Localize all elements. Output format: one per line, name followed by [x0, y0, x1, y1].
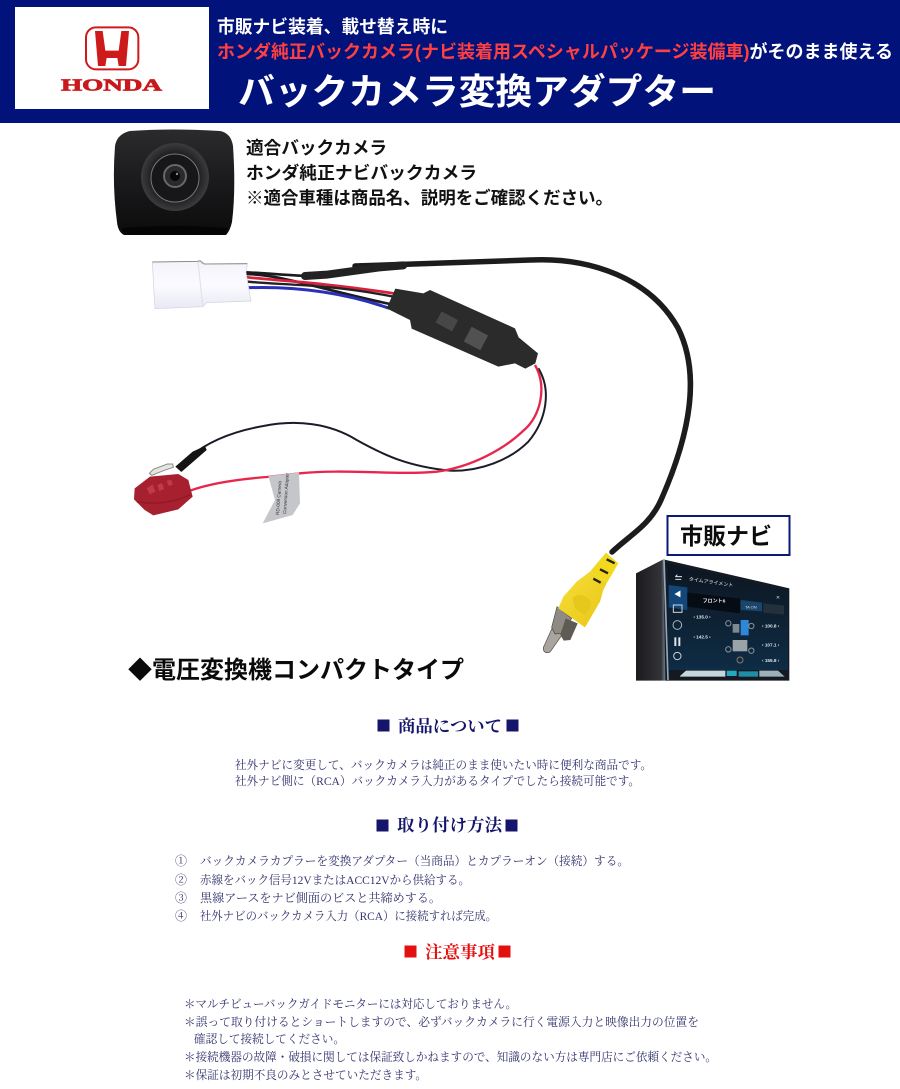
navi values: ‹ 100.8 › [762, 623, 780, 628]
caution notes: ＊誤って取り付けるとショートしますので、必ずバックカメラに行く電源入力と映像出力の位置を [184, 1014, 699, 1029]
navi menu column: ◀ [674, 590, 681, 599]
section: about the product [235, 715, 652, 788]
label tag: Conversion Adapter [282, 472, 290, 514]
navi values: ‹ 135.0 › [693, 615, 711, 620]
navi label: 市販ナビ [680, 523, 772, 549]
red fuse tap [134, 474, 193, 515]
caution notes: ＊接続機器の故障・破損に関しては保証致しかねますので、知識のない方は専門店にご依頼ください。 [184, 1049, 717, 1064]
heading: cautions: 注意事項 [425, 942, 496, 962]
installation steps: ③ [175, 891, 187, 905]
section: installation [175, 815, 629, 923]
navi values: ‹ 155.8 › [762, 658, 780, 663]
navi screen title: タイムアライメント [688, 576, 734, 589]
caution notes: ＊マルチビューバックガイドモニターには対応しておりません。 [184, 996, 517, 1011]
white coupler [152, 261, 251, 309]
heading: cautions: ■ [403, 941, 418, 962]
heading: about product: ■ [376, 715, 391, 736]
navi label [668, 516, 790, 555]
heading: about product: 商品について [398, 717, 502, 736]
heading: about product [376, 715, 520, 736]
label tag [263, 472, 300, 523]
compatible camera text: ※適合車種は商品名、説明をご確認ください。 [246, 188, 613, 208]
aftermarket navi unit: × [776, 594, 780, 601]
compatible camera text: 適合バックカメラ [246, 138, 387, 158]
installation steps: 黒線アースをナビ側面のビスと共締めする。 [200, 890, 441, 905]
aftermarket navi unit [636, 559, 789, 681]
caution notes: ＊保証は初期不良のみとさせていただきます。 [184, 1067, 427, 1082]
caution notes [184, 996, 717, 1082]
installation steps [175, 853, 629, 923]
Honda logo panel [15, 7, 209, 109]
wires to connector [247, 265, 403, 308]
heading: cautions: ■ [497, 941, 512, 962]
aftermarket navi unit: フロント6 [703, 599, 726, 605]
banner title: バックカメラ変換アダプター [238, 71, 716, 112]
installation steps: 赤線をバック信号12VまたはACC12Vから供給する。 [200, 872, 470, 887]
installation steps: バックカメラカプラーを変換アダプター（当商品）とカプラーオン（接続）する。 [200, 853, 629, 868]
navi values: ‹ 107.1 › [762, 643, 780, 648]
black module [387, 289, 538, 369]
heading: about product: ■ [505, 715, 520, 736]
caution notes: 確認して接続してください。 [194, 1031, 345, 1046]
navi hardware buttons [680, 671, 725, 677]
ground terminal [149, 464, 173, 475]
heading: installation: 取り付け方法 [397, 815, 504, 835]
compatible camera text [246, 138, 613, 208]
lower wires [190, 368, 546, 471]
compatible camera text: ホンダ純正ナビバックカメラ [246, 163, 477, 183]
icon: back camera photo [114, 130, 234, 235]
aftermarket navi unit: TA ON [745, 604, 757, 609]
navi values [693, 615, 780, 663]
label tag: RD-008 Camera [275, 480, 282, 515]
installation steps: ① [175, 854, 187, 868]
Honda logo panel: HONDA [61, 76, 163, 94]
about product text [235, 757, 652, 788]
about product text: 社外ナビに変更して、バックカメラは純正のまま使いたい時に便利な商品です。 [235, 757, 652, 772]
navi values: ‹ 142.5 › [693, 635, 711, 640]
about product text: 社外ナビ側に（RCA）バックカメラ入力があるタイプでしたら接続可能です。 [235, 773, 640, 788]
heading: installation [375, 815, 519, 836]
heading: installation: ■ [504, 815, 519, 836]
heading: cautions [403, 941, 512, 962]
section: cautions [184, 941, 717, 1082]
installation steps: 社外ナビのバックカメラ入力（RCA）に接続すれば完成。 [200, 908, 497, 923]
header banner [0, 0, 900, 123]
metal pin [543, 623, 565, 653]
yellow body [558, 572, 607, 627]
banner subtitle line 2: ホンダ純正バックカメラ(ナビ装着用スペシャルパッケージ装備車)がそのまま使える [217, 41, 893, 62]
compact type caption: ◆電圧変換機コンパクトタイプ [128, 657, 464, 684]
RCA plug [543, 553, 618, 653]
navi menu column [669, 585, 687, 660]
installation steps: ④ [175, 909, 187, 923]
adapter harness photo [134, 261, 546, 523]
banner subtitle line 1: 市販ナビ装着、載せ替え時に [217, 16, 448, 37]
installation steps: ② [175, 873, 187, 887]
long black video cable [355, 260, 690, 552]
heading: installation: ■ [375, 815, 390, 836]
ribbed collar [590, 553, 618, 583]
